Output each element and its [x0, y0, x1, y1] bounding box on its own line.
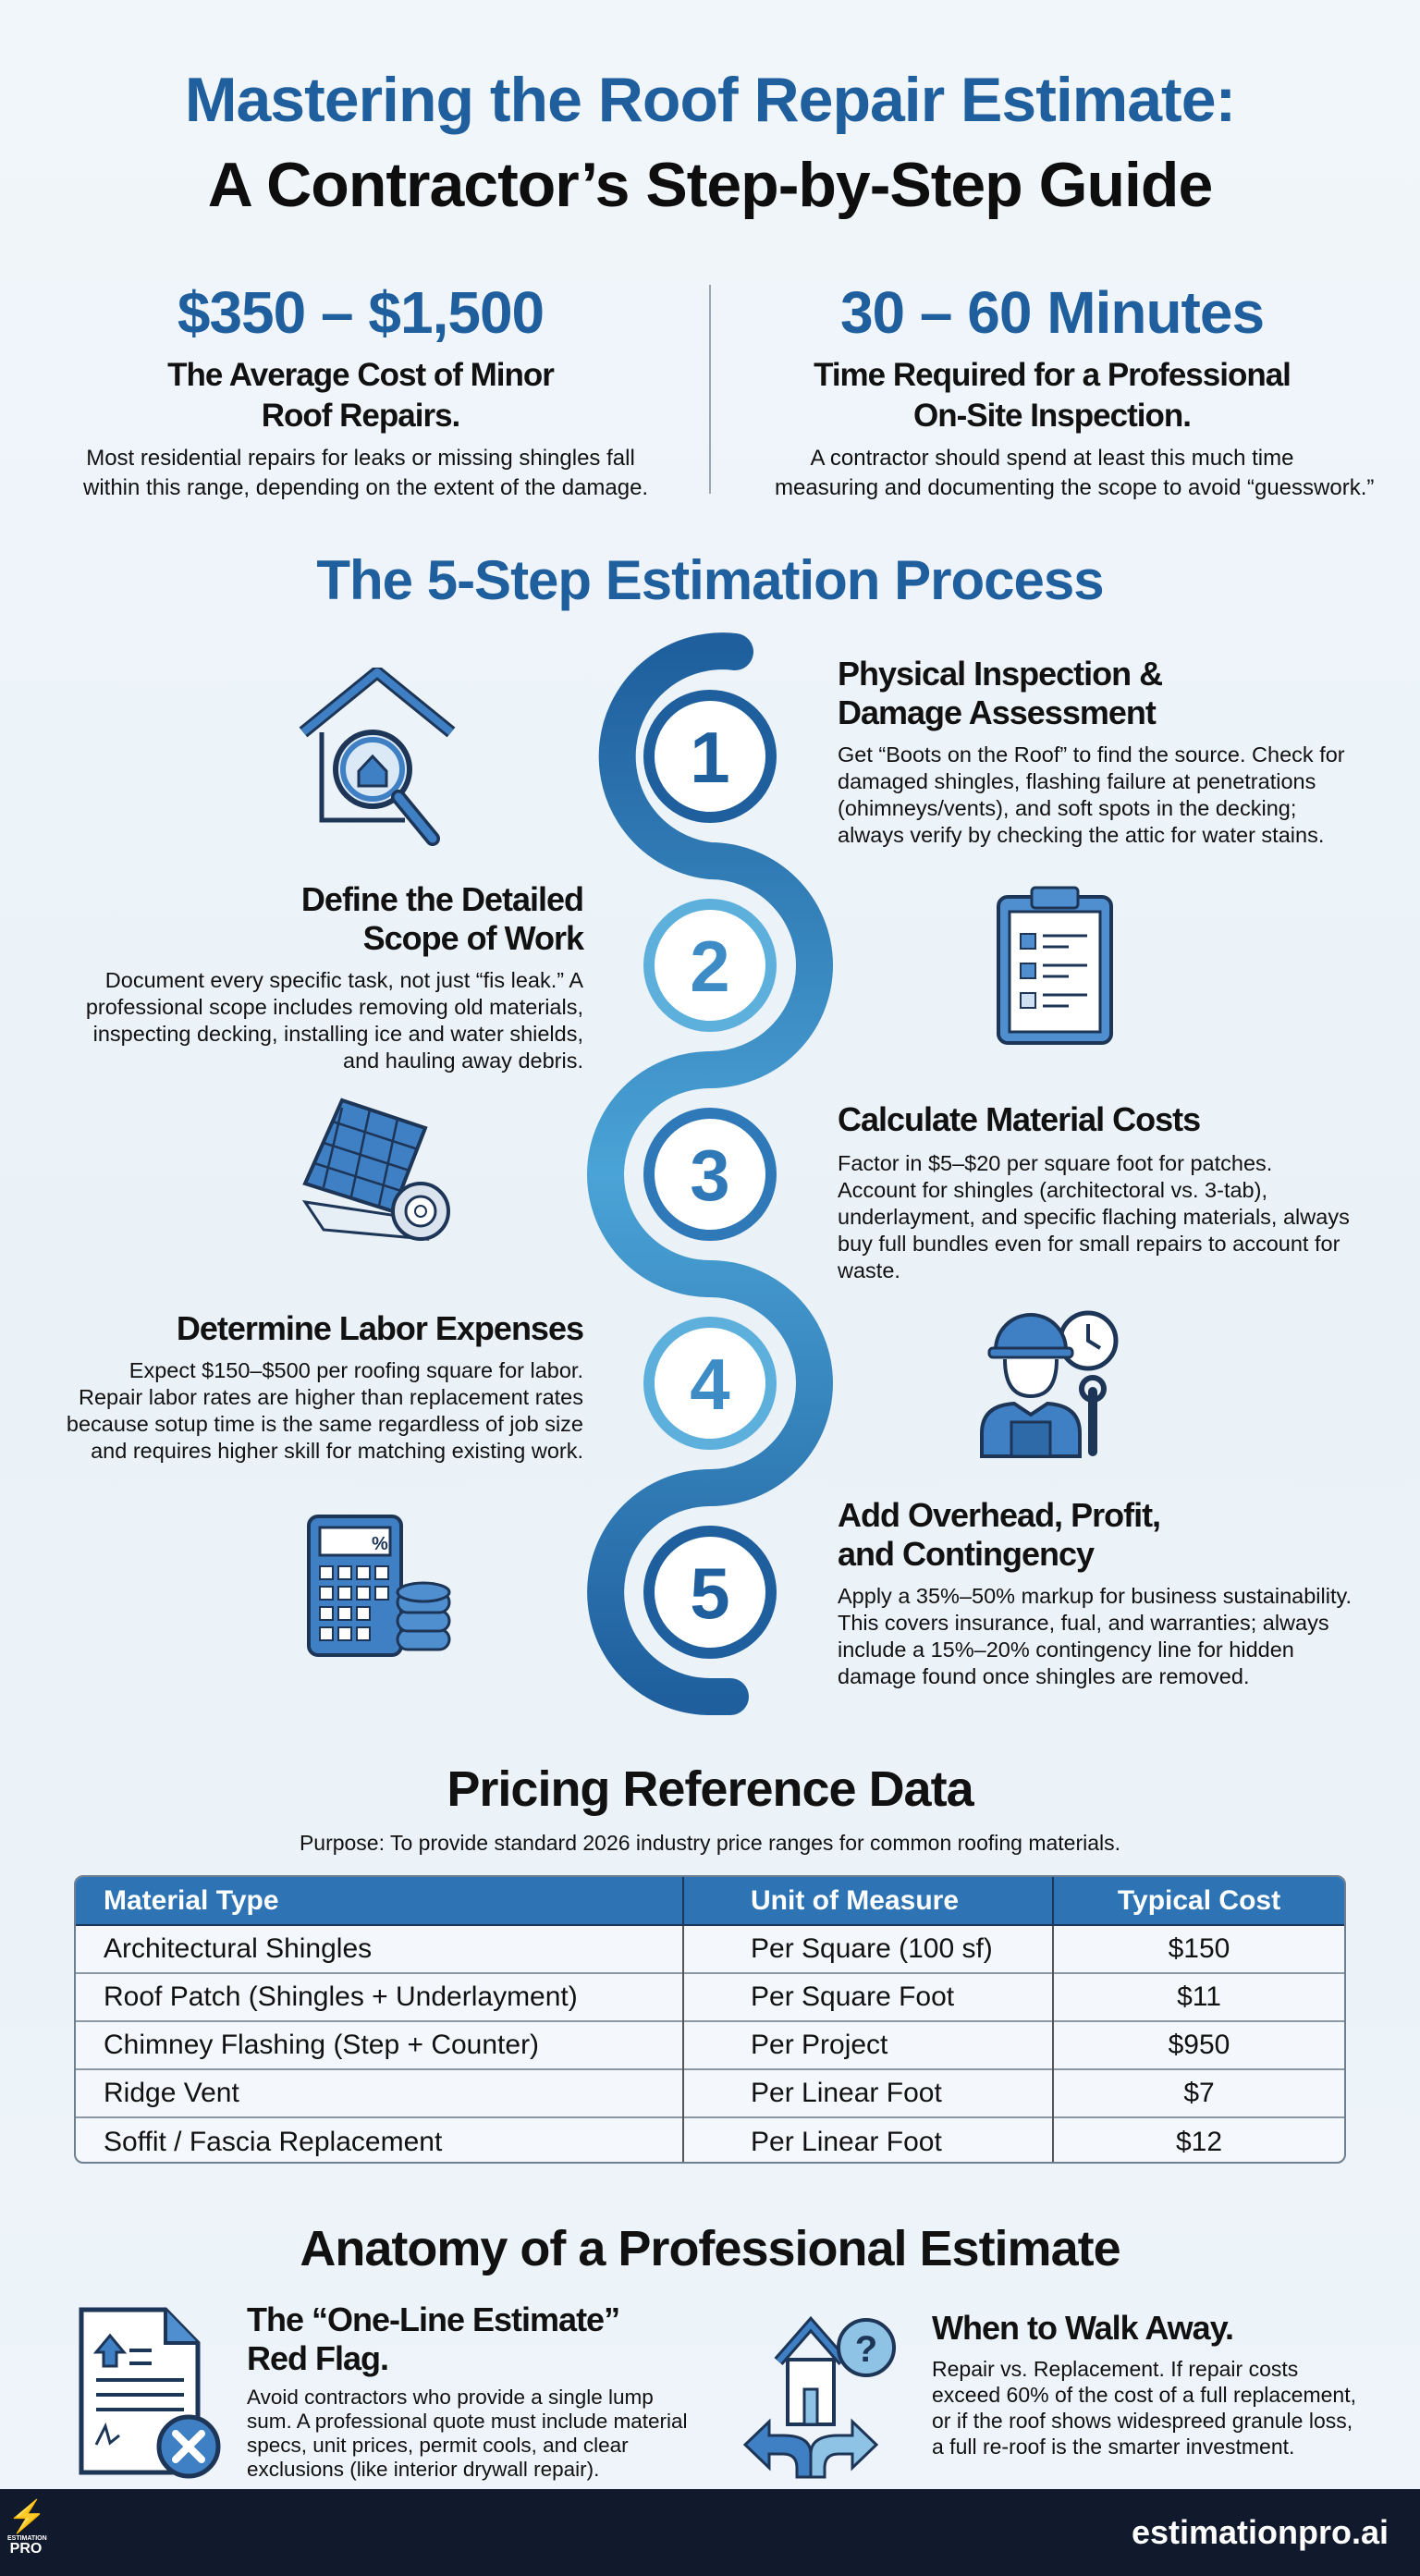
icon: house with question and arrows: [743, 2316, 896, 2478]
logo: ESTIMATION: [7, 2535, 47, 2542]
text: one-line estimate: Red Flag.: [247, 2339, 388, 2377]
step 2 circle: [649, 904, 771, 1026]
step 4 text: [67, 1309, 583, 1463]
text: when to walk away: a full re-roof is the smarter investment.: [932, 2435, 1294, 2459]
step 4 text: Expect $150–$500 per roofing square for labor.: [129, 1358, 583, 1382]
step 5 text: Add Overhead, Profit,: [838, 1496, 1160, 1534]
pricing table: $950: [1169, 2030, 1230, 2060]
website: estimationpro.ai: [1132, 2513, 1389, 2551]
stat: cost: [83, 279, 648, 500]
step 4 text: and requires higher skill for matching existing work.: [91, 1439, 583, 1463]
pricing table: $150: [1169, 1933, 1230, 1964]
text: one-line estimate: [247, 2300, 688, 2481]
pricing table: Roof Patch (Shingles + Underlayment): [104, 1981, 578, 2012]
icon: clipboard: [997, 886, 1113, 1045]
step 2 text: professional scope includes removing old materials,: [86, 995, 583, 1019]
stat: cost: Most residential repairs for leaks or missing shingles fall: [86, 446, 635, 471]
icon: document with x: [80, 2308, 220, 2478]
step 3 text: Factor in $5–$20 per square foot for patches.: [838, 1151, 1272, 1175]
step 1 text: Get “Boots on the Roof” to find the source. Check for: [838, 742, 1345, 767]
step 3 text: buy full bundles even for small repairs to account for: [838, 1232, 1340, 1256]
stat: cost: The Average Cost of Minor: [167, 357, 554, 393]
step 2 text: [86, 880, 584, 1073]
pricing table: Typical Cost: [1118, 1884, 1280, 1916]
step 3 text: Account for shingles (architectoral vs. 3-tab),: [838, 1178, 1267, 1202]
step 3 text: underlayment, and specific flaching materials, always: [838, 1205, 1350, 1229]
logo: ⚡: [7, 2499, 46, 2534]
step 1 text: Physical Inspection &: [838, 655, 1162, 693]
icon: calculator and coins: [307, 1515, 451, 1657]
text: when to walk away: or if the roof shows widespreed granule loss,: [932, 2409, 1353, 2433]
step 3 circle: 3: [690, 1135, 730, 1216]
pricing table: Per Linear Foot: [751, 2127, 942, 2156]
stat: time: Time Required for a Professional: [814, 357, 1291, 393]
step 2 text: Define the Detailed: [301, 880, 583, 918]
icon: house inspection: [300, 668, 455, 846]
step 5 text: Apply a 35%–50% markup for business sustainability.: [838, 1584, 1352, 1608]
title: Mastering the Roof Repair Estimate:: [185, 65, 1235, 135]
pricing table: Per Project: [751, 2030, 888, 2060]
footer: [0, 2489, 1420, 2576]
text: one-line estimate: exclusions (like interior drywall repair).: [247, 2458, 599, 2481]
title: [185, 65, 1235, 220]
pricing table: $11: [1177, 1981, 1221, 2012]
stat: time: [775, 279, 1374, 500]
heading: pricing reference: Pricing Reference Data: [447, 1761, 973, 1817]
icon: house with question and arrows: ?: [855, 2329, 877, 2370]
icon: shingles and roll: [301, 1098, 450, 1241]
step 2 text: inspecting decking, installing ice and water shields,: [93, 1022, 583, 1046]
stat: time: On-Site Inspection.: [913, 398, 1191, 434]
stat: cost: Roof Repairs.: [262, 398, 459, 434]
pricing table: Per Square (100 sf): [751, 1933, 993, 1964]
step 5 text: This covers insurance, fual, and warranties; always: [838, 1611, 1329, 1635]
step 5 circle: [649, 1531, 771, 1653]
step 2 text: and hauling away debris.: [343, 1049, 583, 1073]
pricing table: Architectural Shingles: [104, 1933, 372, 1964]
heading: anatomy: Anatomy of a Professional Estimate: [300, 2221, 1120, 2276]
step 4 text: because sotup time is the same regardless of job size: [67, 1412, 583, 1436]
icon: worker with clock and wrench: [980, 1311, 1119, 1458]
pricing table: Chimney Flashing (Step + Counter): [104, 2030, 539, 2060]
logo: PRO: [10, 2541, 42, 2557]
stat: time: A contractor should spend at least this much time: [811, 446, 1293, 471]
text: when to walk away: Repair vs. Replacement. If repair costs: [932, 2357, 1298, 2381]
step 3 circle: [649, 1113, 771, 1235]
stat: cost: $350 – $1,500: [178, 279, 544, 346]
pricing table: Per Square Foot: [751, 1981, 954, 2012]
text: when to walk away: When to Walk Away.: [932, 2309, 1233, 2347]
step 4 text: Determine Labor Expenses: [177, 1309, 583, 1347]
stat: time: measuring and documenting the scope to avoid “guesswork.”: [775, 475, 1374, 500]
stat: cost: within this range, depending on the extent of the damage.: [83, 475, 648, 500]
step 3 text: Calculate Material Costs: [838, 1100, 1200, 1138]
step 1 text: Damage Assessment: [838, 693, 1156, 731]
icon: calculator and coins: %: [372, 1534, 388, 1554]
text: when to walk away: [932, 2309, 1356, 2459]
step 5 text: include a 15%–20% contingency line for hidden: [838, 1638, 1294, 1662]
step 5 circle: 5: [690, 1552, 730, 1634]
text: one-line estimate: specs, unit prices, permit cools, and clear: [247, 2434, 629, 2457]
pricing table: $7: [1183, 2078, 1215, 2108]
step 1 text: (ohimneys/vents), and soft spots in the decking;: [838, 796, 1296, 820]
step 1 text: damaged shingles, flashing failure at penetrations: [838, 769, 1316, 793]
text: one-line estimate: Avoid contractors who provide a single lump: [247, 2386, 654, 2409]
step 1 text: always verify by checking the attic for water stains.: [838, 823, 1324, 847]
step 4 text: Repair labor rates are higher than replacement rates: [79, 1385, 583, 1409]
step 4 circle: [649, 1322, 771, 1444]
step 1 text: [838, 655, 1345, 847]
step 1 circle: [649, 695, 771, 817]
step 5 text: [838, 1496, 1352, 1688]
pricing table: Soffit / Fascia Replacement: [104, 2127, 442, 2156]
text: one-line estimate: The “One-Line Estimate”: [247, 2300, 619, 2338]
step 1 circle: 1: [690, 717, 730, 798]
serpentine step chain: [587, 632, 833, 1715]
pricing table: Material Type: [104, 1884, 279, 1916]
step 2 text: Scope of Work: [363, 919, 583, 957]
pricing table: Per Linear Foot: [751, 2078, 942, 2108]
text: purpose: Purpose: To provide standard 2026 industry price ranges for common roofing materials.: [300, 1831, 1120, 1855]
step 5 text: damage found once shingles are removed.: [838, 1664, 1249, 1688]
logo: [7, 2498, 47, 2557]
step 2 text: Document every specific task, not just “fis leak.” A: [105, 968, 583, 992]
text: one-line estimate: sum. A professional quote must include material: [247, 2410, 688, 2433]
pricing table: Ridge Vent: [104, 2078, 239, 2108]
pricing table: $12: [1176, 2127, 1222, 2156]
heading: 5-step process: The 5-Step Estimation Process: [316, 549, 1104, 611]
title: A Contractor’s Step-by-Step Guide: [208, 150, 1212, 220]
step 3 text: waste.: [838, 1258, 900, 1282]
step 4 circle: 4: [690, 1343, 730, 1425]
pricing table: Unit of Measure: [751, 1884, 959, 1916]
pricing table: [74, 1875, 1346, 2164]
text: when to walk away: exceed 60% of the cost of a full replacement,: [932, 2383, 1356, 2407]
step 5 text: and Contingency: [838, 1535, 1094, 1573]
step 3 text: [838, 1100, 1350, 1282]
step 2 circle: 2: [690, 926, 730, 1007]
stat: time: 30 – 60 Minutes: [840, 279, 1264, 346]
